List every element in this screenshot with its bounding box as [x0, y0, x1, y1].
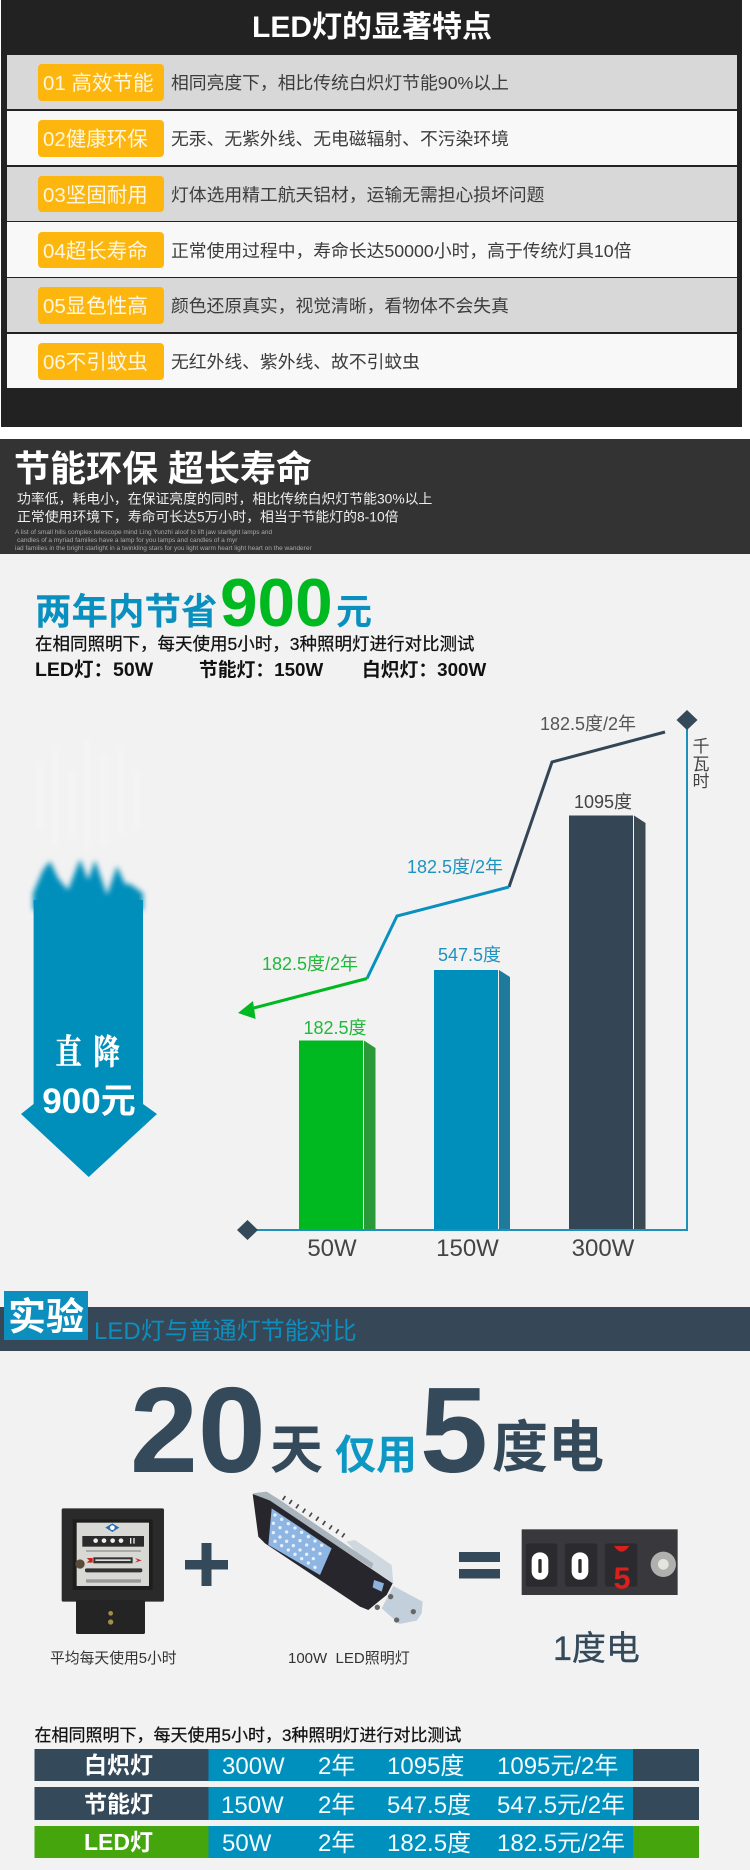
bar: 50W: 182.5度 — [303, 1018, 367, 1038]
table row: LED lamp: LED灯 — [84, 1829, 153, 1855]
wattage list: LED灯：50W — [35, 659, 154, 681]
table row: incandescent: 2年 — [318, 1753, 355, 1780]
headline: 20 days only 5 kWh: 20 — [130, 1362, 266, 1498]
headline: 20 days only 5 kWh: 仅用 — [335, 1432, 417, 1478]
icon: meter counter reading 5: 5 — [613, 1561, 631, 1595]
bar: 150W — [434, 945, 510, 1262]
heading: save 900 yuan in two years: 两年内节省 — [35, 591, 218, 632]
feature row 04: 正常使用过程中，寿命长达50000小时，高于传统灯具10倍 — [171, 241, 632, 261]
section header: experiment: 实验 — [8, 1297, 84, 1339]
feature row 02: 02健康环保 — [43, 128, 148, 151]
trend labels: 182.5度/2年 — [540, 714, 636, 734]
arrow text: 降 — [93, 1025, 120, 1074]
headline: 20 days only 5 kWh: 5 — [420, 1362, 488, 1498]
arrow: drops 900 yuan — [21, 740, 157, 1177]
bar: 300W: 1095度 — [574, 792, 632, 812]
axis unit: 时 — [692, 772, 710, 791]
table row: incandescent: 300W — [222, 1753, 285, 1780]
heading: save 900 yuan in two years: 900 — [220, 566, 333, 641]
caption: 100W LED lamp: 100W LED照明灯 — [288, 1650, 410, 1667]
table caption: 在相同照明下，每天使用5小时，3种照明灯进行对比测试 — [34, 1725, 461, 1745]
feature row 03: 03坚固耐用 — [43, 184, 148, 207]
banner description — [17, 490, 432, 524]
banner description: 功率低，耗电小，在保证亮度的同时，相比传统白炽灯节能30%以上 — [17, 490, 432, 506]
bar chart: energy by wattage — [237, 710, 710, 1262]
feature row 06: 06不引蚊虫 — [43, 351, 148, 374]
headline: 20 days only 5 kWh: 天 — [270, 1421, 323, 1480]
table row: energy saving lamp: 150W — [221, 1792, 284, 1819]
icon: LED street lamp — [253, 1492, 423, 1624]
feature row 06 — [7, 334, 737, 388]
table row: LED lamp: 50W — [222, 1830, 272, 1857]
feature row 01 — [7, 55, 737, 109]
feature row 05 — [7, 278, 737, 332]
table row: energy saving lamp — [34, 1787, 699, 1820]
feature row 06: 无红外线、紫外线、故不引蚊虫 — [171, 352, 420, 372]
feature row 03: 灯体选用精工航天铝材，运输无需担心损坏问题 — [171, 185, 545, 205]
feature row 05: 05显色性高 — [43, 295, 148, 318]
table row: energy saving lamp: 节能灯 — [84, 1791, 153, 1817]
small English text: A list of small hills complex telescope mind Ling Yunzhi aloof to lift jaw starlight lamps and — [15, 529, 273, 536]
feature row 03 — [7, 167, 737, 221]
label: 1 kWh: 1度电 — [553, 1630, 640, 1668]
caption: 5 hours per day: 平均每天使用5小时 — [50, 1650, 177, 1667]
table row: energy saving lamp: 547.5度 — [387, 1792, 471, 1819]
table row: LED lamp — [34, 1826, 699, 1858]
panel: LED features — [1, 0, 742, 427]
small English text — [15, 529, 312, 552]
axis unit: 千 — [692, 737, 710, 756]
feature row 02 — [7, 111, 737, 165]
table row: LED lamp: 2年 — [318, 1830, 355, 1857]
wattage list: 节能灯：150W — [199, 659, 323, 680]
bar: 300W: 300W — [572, 1235, 635, 1262]
bar: 150W: 547.5度 — [438, 945, 501, 965]
feature row 01: 01 高效节能 — [43, 72, 154, 95]
icon: meter counter reading 5 — [522, 1529, 678, 1595]
icon: electricity meter — [62, 1508, 164, 1634]
title: LED features: LED灯的显著特点 — [252, 11, 492, 44]
icon: equals — [459, 1552, 500, 1578]
bar: 300W — [569, 792, 646, 1262]
icon: plus — [185, 1543, 228, 1586]
bar: 50W: 50W — [307, 1235, 357, 1262]
table row: incandescent: 1095元/2年 — [497, 1753, 618, 1780]
trend labels: 182.5度/2年 — [407, 857, 503, 877]
feature row 01: 相同亮度下，相比传统白炽灯节能90%以上 — [171, 73, 509, 93]
feature row 04: 04超长寿命 — [43, 240, 148, 263]
table row: incandescent — [34, 1749, 699, 1781]
table row: incandescent: 1095度 — [387, 1753, 464, 1780]
trend line with arrow — [238, 732, 665, 1019]
banner description: 正常使用环境下，寿命可长达5万小时，相当于节能灯的8-10倍 — [17, 508, 399, 524]
panel: energy saving banner — [0, 439, 750, 554]
table row: energy saving lamp: 547.5元/2年 — [497, 1792, 625, 1819]
trend labels: 182.5度/2年 — [262, 954, 358, 974]
headline: 20 days only 5 kWh — [130, 1362, 604, 1498]
feature row 04 — [7, 222, 737, 277]
section header: experiment: LED灯与普通灯节能对比 — [94, 1318, 357, 1345]
feature row 02: 无汞、无紫外线、无电磁辐射、不污染环境 — [171, 129, 509, 149]
arrow text: 直 — [55, 1025, 82, 1074]
wattage list: 白炽灯：300W — [362, 659, 486, 680]
trend labels — [262, 714, 636, 974]
feature row 05: 颜色还原真实，视觉清晰，看物体不会失真 — [171, 296, 509, 316]
small English text: iad families in the bright starlight in a twinkling stars for you light warm heart light heart on the wanderer — [15, 545, 312, 552]
heading: save 900 yuan in two years — [35, 566, 372, 641]
axis unit: 瓦 — [692, 755, 710, 774]
table row: LED lamp: 182.5元/2年 — [497, 1830, 625, 1857]
axis unit — [692, 737, 710, 791]
arrow text — [42, 1025, 136, 1121]
small English text: candles of a myriad families have a lamp for you lamps and candles of a myr — [17, 537, 238, 544]
table row: energy saving lamp: 2年 — [318, 1792, 355, 1819]
section header: experiment — [0, 1291, 750, 1351]
heading: save 900 yuan in two years: 元 — [336, 591, 372, 632]
axes — [237, 710, 698, 1240]
wattage list — [35, 659, 486, 681]
bar: 50W — [299, 1018, 376, 1262]
test conditions: 在相同照明下，每天使用5小时，3种照明灯进行对比测试 — [35, 634, 474, 654]
arrow text: 900元 — [42, 1082, 136, 1121]
heading: energy saving, long life: 节能环保 超长寿命 — [14, 448, 312, 489]
table row: LED lamp: 182.5度 — [387, 1830, 471, 1857]
bar: 150W: 150W — [436, 1235, 499, 1262]
headline: 20 days only 5 kWh: 度电 — [492, 1416, 604, 1479]
table row: incandescent: 白炽灯 — [84, 1752, 153, 1778]
